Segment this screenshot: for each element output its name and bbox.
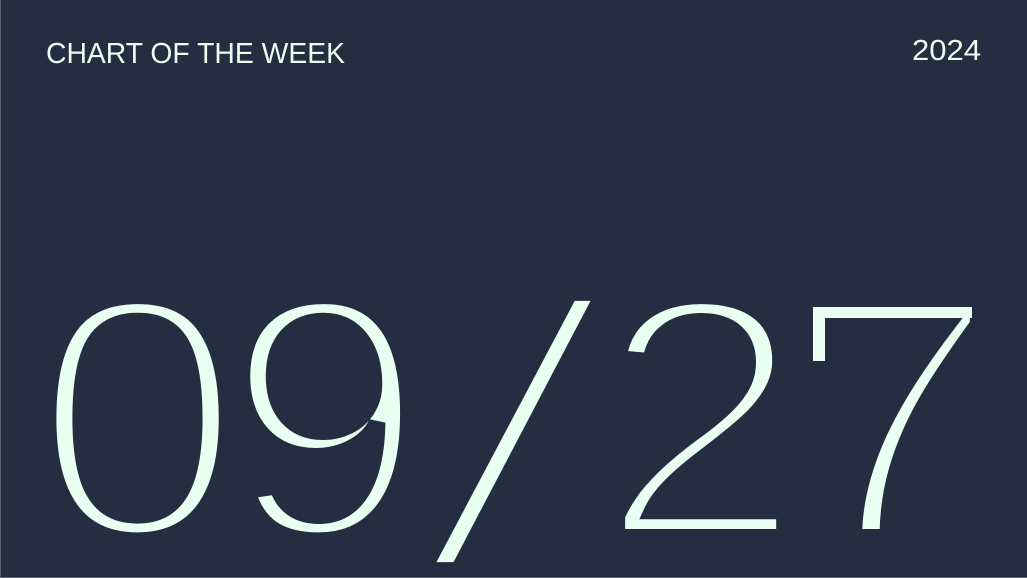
large date 09/27 xyxy=(32,222,998,578)
year: 2024 xyxy=(912,35,981,67)
digit 7 top bar and left tick xyxy=(813,307,972,361)
title: CHART OF THE WEEK xyxy=(46,38,345,70)
header row xyxy=(46,35,981,70)
